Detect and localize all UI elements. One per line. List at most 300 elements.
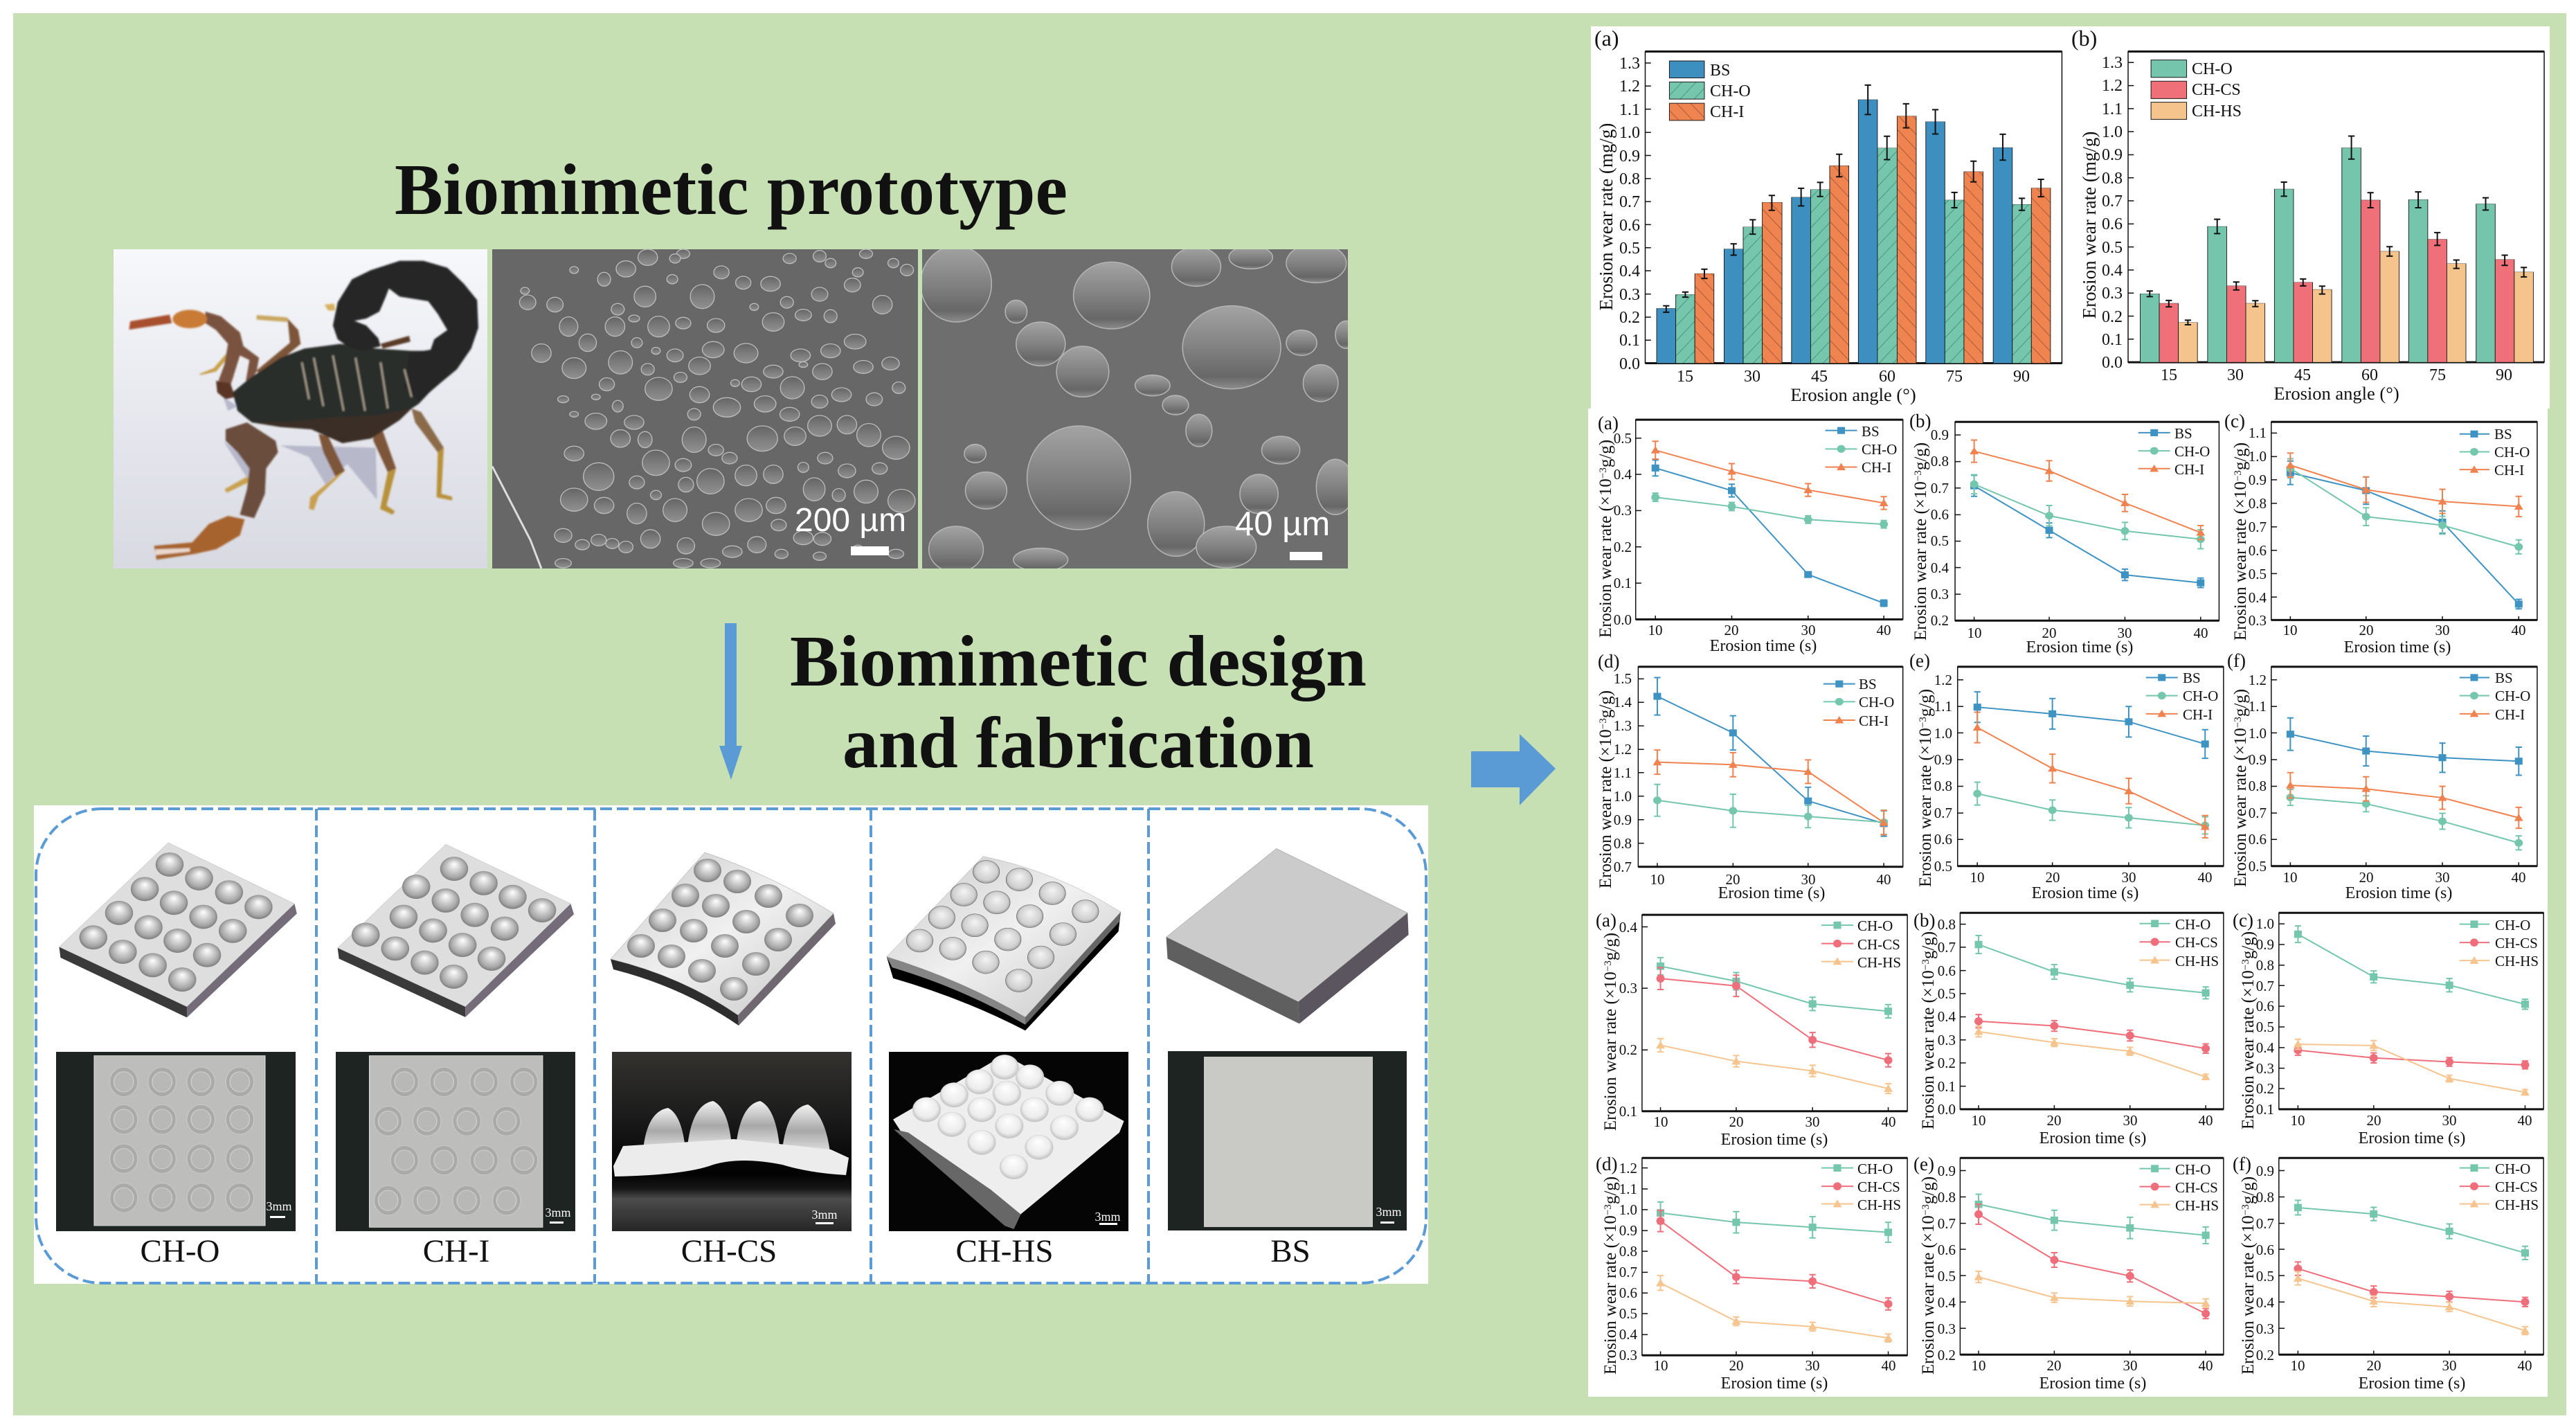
bar chart: erosion wear rate BS, CH-O, CH-I: 30: [1744, 368, 1760, 386]
line chart: row 4 (d): 0.6: [1619, 1285, 1637, 1301]
line chart: row 1 (c): Erosion wear rate (×10: [2231, 481, 2250, 641]
line chart: row 2 (f): 0.8: [2249, 778, 2267, 794]
line chart: row 3 (a): 0.2: [1619, 1041, 1637, 1058]
bar chart: erosion wear rate BS, CH-O, CH-I: Erosion angle (°): [1790, 384, 1916, 405]
bar chart: erosion wear rate BS, CH-O, CH-I: 60: [1879, 368, 1895, 386]
line chart: row 1 (c): 0.5: [2249, 566, 2267, 582]
line chart: row 4 (f): 40: [2517, 1357, 2532, 1374]
bar chart: erosion wear rate BS, CH-O, CH-I: 0.5: [1619, 240, 1640, 258]
bar chart: erosion wear rate CH-O, CH-CS, CH-HS: 1.1: [2102, 100, 2123, 118]
line chart: row 3 (c): CH-HS: [2495, 953, 2539, 969]
line chart: row 2 (f): 40: [2512, 869, 2525, 886]
photo: CH-O specimen: [56, 1052, 296, 1231]
specimen labels: CH-O: [141, 1233, 219, 1269]
line chart: row 1 (c): CH-O: [2494, 444, 2530, 460]
line chart: row 3 (a): g/g): [1601, 933, 1620, 960]
line chart: row 1 (b): CH-I: [2174, 461, 2204, 478]
line chart: row 1 (b): 0.3: [1931, 586, 1949, 602]
line chart: row 1 (a): −3: [1598, 467, 1609, 478]
line chart: row 3 (b): g/g): [1919, 931, 1938, 959]
bar chart: erosion wear rate CH-O, CH-CS, CH-HS: 15: [2161, 366, 2177, 384]
line chart: row 3 (c): 0.2: [2256, 1080, 2274, 1097]
line chart: row 2 (f): (f): [2227, 650, 2246, 671]
line chart: row 2 (f): Erosion time (s): [2345, 884, 2452, 902]
line chart: row 4 (e): 20: [2046, 1357, 2062, 1374]
line chart: row 2 (d): 10: [1650, 871, 1664, 888]
line chart: row 4 (d): CH-HS: [1857, 1197, 1901, 1213]
line chart: row 2 (d): CH-I: [1859, 713, 1889, 729]
line chart: row 3 (c): CH-CS: [2495, 935, 2538, 951]
line chart: row 4 (d): 0.9: [1619, 1222, 1637, 1239]
title: biomimetic prototype: Biomimetic prototype: [395, 149, 1068, 230]
line chart: row 4 (d): CH-CS: [1857, 1179, 1900, 1195]
line chart: row 3 (b): 0.4: [1938, 1008, 1956, 1025]
line chart: row 1 (b): 0.9: [1931, 427, 1949, 443]
line chart: row 4 (d): 0.8: [1619, 1243, 1637, 1260]
line chart: row 3 (c): 0.9: [2256, 936, 2274, 953]
line chart: row 4 (f): 0.6: [2256, 1242, 2274, 1258]
line chart: row 3 (b): −3: [1920, 959, 1931, 970]
line chart: row 4 (f): [2233, 1154, 2543, 1393]
line chart: row 4 (e): 0.6: [1938, 1242, 1956, 1258]
bar chart: erosion wear rate CH-O, CH-CS, CH-HS: 0.8: [2102, 170, 2123, 188]
line chart: row 1 (a): 0.5: [1614, 430, 1632, 447]
bar chart: erosion wear rate BS, CH-O, CH-I: 0.6: [1619, 217, 1640, 235]
line chart: row 2 (f): 20: [2359, 869, 2373, 886]
line chart: row 3 (a): CH-HS: [1857, 954, 1901, 971]
arrow: down: [719, 623, 742, 780]
line chart: row 2 (f): CH-I: [2495, 706, 2525, 723]
line chart: row 1 (c): 40: [2512, 622, 2525, 638]
photo: scorpion: [114, 249, 487, 569]
line chart: row 4 (e): 0.8: [1938, 1189, 1956, 1206]
line chart: row 2 (d): 40: [1876, 871, 1891, 888]
photo: CH-HS specimen: 3mm: [1095, 1210, 1121, 1224]
bar chart: erosion wear rate CH-O, CH-CS, CH-HS: 0.3: [2102, 285, 2123, 303]
line chart: row 2 (f): −3: [2233, 717, 2244, 728]
line chart: row 1 (c): CH-I: [2494, 462, 2524, 478]
bar chart: erosion wear rate CH-O, CH-CS, CH-HS: 1.3: [2102, 54, 2123, 72]
line chart: row 1 (c): Erosion time (s): [2344, 638, 2451, 656]
line chart: row 1 (a): BS: [1862, 423, 1880, 440]
line chart: row 4 (e): 10: [1972, 1357, 1985, 1374]
line chart: row 4 (f): g/g): [2239, 1176, 2258, 1204]
line chart: row 2 (f): 1.0: [2249, 725, 2267, 742]
line chart: row 3 (a): CH-CS: [1857, 936, 1900, 953]
line chart: row 2 (e): 40: [2197, 869, 2213, 886]
line chart: row 4 (f): 0.5: [2256, 1268, 2274, 1285]
line chart: row 3 (c): g/g): [2239, 931, 2258, 959]
line chart: row 4 (e): Erosion wear rate (×10: [1919, 1215, 1938, 1375]
line chart: row 1 (b): 30: [2117, 625, 2132, 641]
line chart: row 2 (f): 10: [2283, 869, 2297, 886]
line chart: row 2 (f): [2227, 650, 2537, 902]
line chart: row 4 (d): 0.3: [1619, 1347, 1637, 1363]
line chart: row 1 (a): 0.2: [1614, 539, 1632, 555]
model: BS: [1167, 848, 1409, 1023]
bar chart: erosion wear rate BS, CH-O, CH-I: 1.3: [1619, 55, 1640, 73]
line chart: row 4 (f): Erosion wear rate (×10: [2239, 1215, 2258, 1375]
line chart: row 2 (d): 20: [1725, 871, 1740, 888]
line chart: row 1 (a): 0.0: [1614, 611, 1632, 628]
photo: CH-CS specimen: [612, 1052, 852, 1231]
bar chart: erosion wear rate BS, CH-O, CH-I: CH-O: [1710, 82, 1751, 100]
line chart: row 2 (f): BS: [2495, 670, 2513, 686]
line chart: row 2 (d): 1.2: [1614, 741, 1632, 758]
line chart: row 4 (d): 0.4: [1619, 1326, 1638, 1343]
line chart: row 3 (a): 40: [1882, 1113, 1895, 1130]
line chart: row 4 (e): CH-CS: [2175, 1179, 2218, 1196]
line chart: row 1 (c): 0.7: [2249, 519, 2267, 535]
bar chart: erosion wear rate CH-O, CH-CS, CH-HS: 30: [2227, 366, 2244, 384]
line chart: row 3 (a): (a): [1596, 910, 1616, 931]
line chart: row 2 (d): 30: [1801, 871, 1815, 888]
line chart: row 2 (e): CH-O: [2183, 688, 2218, 704]
line chart: row 1 (b): CH-O: [2174, 443, 2210, 460]
line chart: row 1 (a): (a): [1598, 413, 1619, 433]
line chart: row 1 (a): Erosion time (s): [1710, 637, 1817, 655]
bar chart: erosion wear rate CH-O, CH-CS, CH-HS: 45: [2294, 366, 2311, 384]
line chart: row 1 (b): 0.2: [1931, 612, 1949, 629]
line chart: row 4 (d): g/g): [1601, 1176, 1620, 1204]
line chart: row 2 (f): 0.6: [2249, 831, 2267, 848]
line chart: row 1 (b): 0.4: [1931, 560, 1949, 576]
line chart: row 3 (a): 10: [1653, 1113, 1668, 1130]
line chart: row 2 (d): g/g): [1596, 690, 1615, 718]
line chart: row 1 (c): 0.8: [2249, 495, 2267, 512]
line chart: row 1 (a): 10: [1648, 622, 1663, 638]
bar chart: erosion wear rate BS, CH-O, CH-I: 0.3: [1619, 286, 1640, 304]
line chart: row 1 (b): 40: [2193, 625, 2208, 641]
line chart: row 3 (c): −3: [2240, 959, 2251, 970]
line chart: row 2 (d): 1.0: [1614, 788, 1632, 805]
line chart: row 3 (b): (b): [1913, 910, 1935, 931]
line chart: row 2 (f): Erosion wear rate (×10: [2231, 728, 2250, 887]
bar chart: erosion wear rate CH-O, CH-CS, CH-HS: CH-CS: [2192, 81, 2241, 99]
line chart: row 1 (c): 1.1: [2249, 424, 2267, 441]
line chart: row 4 (d): Erosion time (s): [1721, 1375, 1828, 1393]
line chart: row 2 (d): [1596, 651, 1903, 902]
line chart: row 2 (d): 0.9: [1614, 812, 1632, 828]
bar chart: erosion wear rate BS, CH-O, CH-I: 1.1: [1619, 101, 1640, 119]
line chart: row 4 (e): −3: [1920, 1204, 1931, 1215]
bar chart: erosion wear rate CH-O, CH-CS, CH-HS: 0.0: [2102, 354, 2123, 372]
line chart: row 1 (a): 40: [1876, 622, 1891, 638]
specimen labels: BS: [1270, 1233, 1310, 1269]
line chart: row 3 (c): 0.4: [2256, 1039, 2275, 1056]
line chart: row 1 (c): 0.6: [2249, 542, 2267, 559]
arrow: right: [1471, 734, 1556, 805]
line chart: row 1 (b): Erosion time (s): [2026, 638, 2133, 656]
photo: CH-O specimen: 3mm: [266, 1199, 292, 1213]
line chart: row 4 (f): 0.7: [2256, 1215, 2274, 1232]
line chart: row 1 (b): 0.7: [1931, 480, 1949, 496]
line chart: row 2 (e): 1.1: [1934, 698, 1952, 715]
line chart: row 1 (a): CH-I: [1862, 459, 1891, 476]
bar chart: erosion wear rate BS, CH-O, CH-I: 0.1: [1619, 332, 1640, 350]
photo: CH-HS specimen: [889, 1052, 1128, 1231]
line chart: row 1 (b): [1909, 411, 2219, 656]
line chart: row 4 (f): 20: [2366, 1357, 2381, 1374]
line chart: row 2 (e): BS: [2183, 670, 2201, 686]
panel: specimens: [34, 805, 1428, 1284]
line chart: row 4 (d): 10: [1653, 1357, 1668, 1374]
line chart: row 3 (b): 0.3: [1938, 1032, 1956, 1048]
line chart: row 4 (e): g/g): [1919, 1176, 1938, 1204]
line chart: row 1 (b): 0.8: [1931, 453, 1949, 469]
line chart: row 4 (d): 1.2: [1619, 1160, 1637, 1176]
line chart: row 3 (c): Erosion wear rate (×10: [2239, 970, 2258, 1129]
line chart: row 3 (b): 0.5: [1938, 985, 1956, 1002]
line chart: row 4 (d): CH-O: [1857, 1161, 1893, 1177]
heading: biomimetic design and fabrication: [790, 620, 1367, 783]
line chart: row 2 (d): CH-O: [1859, 694, 1894, 710]
bar chart: erosion wear rate BS, CH-O, CH-I: 0.8: [1619, 170, 1640, 188]
line chart: row 4 (f): 0.8: [2256, 1189, 2274, 1206]
bar chart: erosion wear rate CH-O, CH-CS, CH-HS: CH-HS: [2192, 102, 2242, 120]
line chart: row 4 (d): 0.7: [1619, 1264, 1637, 1280]
bar chart: erosion wear rate BS, CH-O, CH-I: 0.0: [1619, 355, 1640, 373]
line chart: row 3 (a): CH-O: [1857, 918, 1893, 934]
line chart: row 2 (e): 1.2: [1934, 672, 1952, 688]
model: CH-I: [338, 844, 574, 1017]
line chart: row 3 (a): 0.4: [1619, 919, 1638, 936]
bar chart: erosion wear rate CH-O, CH-CS, CH-HS: [2071, 26, 2544, 404]
line chart: row 1 (b): BS: [2174, 425, 2192, 442]
line chart: row 3 (b): 0.2: [1938, 1055, 1956, 1071]
line chart: row 3 (c): 0.7: [2256, 978, 2274, 994]
model: CH-CS: [611, 852, 836, 1026]
line chart: row 4 (d): 20: [1729, 1357, 1743, 1374]
line chart: row 4 (f): 0.4: [2256, 1294, 2275, 1311]
line chart: row 1 (b): 0.5: [1931, 532, 1949, 549]
line chart: row 3 (b): CH-CS: [2175, 934, 2218, 951]
line chart: row 1 (c): −3: [2233, 470, 2244, 481]
line chart: row 2 (d): Erosion time (s): [1718, 884, 1825, 902]
bar chart: erosion wear rate CH-O, CH-CS, CH-HS: 75: [2429, 366, 2446, 384]
line chart: row 2 (d): 0.8: [1614, 835, 1632, 852]
line chart: row 3 (a): 20: [1729, 1113, 1743, 1130]
panel: charts background: [1588, 26, 2550, 1397]
line chart: row 4 (e): 0.5: [1938, 1268, 1956, 1285]
line chart: row 2 (f): 0.7: [2249, 805, 2267, 821]
heading: biomimetic design and fabrication: and fabrication: [843, 702, 1314, 783]
line chart: row 3 (c): 10: [2290, 1112, 2305, 1129]
line chart: row 1 (a): 0.3: [1614, 502, 1632, 519]
line chart: row 1 (b): Erosion wear rate (×10: [1911, 481, 1930, 641]
line chart: row 4 (f): CH-HS: [2495, 1197, 2539, 1213]
line chart: row 3 (c): (c): [2233, 910, 2253, 931]
line chart: row 3 (c): 30: [2442, 1112, 2456, 1129]
line chart: row 4 (f): CH-CS: [2495, 1179, 2538, 1195]
line chart: row 1 (a): 30: [1801, 622, 1815, 638]
line chart: row 2 (e): 10: [1970, 869, 1984, 886]
bar chart: erosion wear rate CH-O, CH-CS, CH-HS: CH-O: [2192, 60, 2233, 78]
bar chart: erosion wear rate BS, CH-O, CH-I: 90: [2013, 368, 2030, 386]
photo: CH-I specimen: [336, 1052, 575, 1231]
photo: BS specimen: [1168, 1051, 1407, 1230]
line chart: row 4 (e): 40: [2199, 1357, 2213, 1374]
model: CH-HS: [887, 857, 1121, 1030]
line chart: row 1 (a): [1596, 413, 1903, 655]
bar chart: erosion wear rate CH-O, CH-CS, CH-HS: 0.7: [2102, 193, 2123, 211]
line chart: row 3 (b): [1913, 910, 2224, 1147]
line chart: row 2 (e): CH-I: [2183, 706, 2213, 723]
line chart: row 4 (d): 1.1: [1619, 1181, 1637, 1197]
line chart: row 2 (e): 20: [2045, 869, 2060, 886]
line chart: row 3 (c): CH-O: [2495, 917, 2530, 933]
line chart: row 4 (e): CH-O: [2175, 1161, 2210, 1178]
line chart: row 3 (a): 0.1: [1619, 1103, 1637, 1120]
photo: CH-CS specimen: 3mm: [811, 1208, 838, 1221]
line chart: row 3 (a): 30: [1805, 1113, 1819, 1130]
bar chart: erosion wear rate CH-O, CH-CS, CH-HS: 0.6: [2102, 215, 2123, 233]
line chart: row 4 (f): Erosion time (s): [2359, 1375, 2465, 1393]
line chart: row 3 (b): Erosion time (s): [2039, 1129, 2146, 1147]
bar chart: erosion wear rate BS, CH-O, CH-I: 0.7: [1619, 193, 1640, 211]
line chart: row 1 (b): (b): [1909, 411, 1931, 431]
heading: biomimetic design and fabrication: Biomimetic design: [790, 620, 1367, 701]
line chart: row 3 (c): 0.8: [2256, 957, 2274, 974]
bar chart: erosion wear rate CH-O, CH-CS, CH-HS: Erosion angle (°): [2273, 383, 2399, 404]
line chart: row 4 (d): −3: [1603, 1204, 1614, 1215]
line chart: row 1 (b): g/g): [1911, 442, 1930, 470]
line chart: row 4 (d): 40: [1882, 1357, 1895, 1374]
line chart: row 3 (b): CH-HS: [2175, 953, 2219, 969]
line chart: row 2 (f): g/g): [2231, 689, 2250, 717]
line chart: row 2 (f): 1.2: [2249, 672, 2267, 688]
bar chart: erosion wear rate BS, CH-O, CH-I: 75: [1946, 368, 1963, 386]
line chart: row 1 (c): (c): [2224, 411, 2245, 431]
line chart: row 2 (e): 0.6: [1934, 831, 1952, 848]
line chart: row 3 (b): 0.6: [1938, 963, 1956, 979]
line chart: row 4 (d): [1596, 1154, 1907, 1393]
line chart: row 2 (e): 0.8: [1934, 778, 1952, 794]
line chart: row 4 (f): −3: [2240, 1204, 2251, 1215]
line chart: row 4 (e): 0.7: [1938, 1215, 1956, 1232]
line chart: row 1 (c): 0.9: [2249, 472, 2267, 488]
specimen labels: CH-I: [423, 1233, 489, 1269]
line chart: row 1 (c): [2224, 411, 2537, 656]
photo: SEM image 40 µm: [921, 244, 1357, 573]
line chart: row 1 (b): 20: [2042, 625, 2056, 641]
line chart: row 3 (a): 0.3: [1619, 980, 1637, 996]
bar chart: erosion wear rate BS, CH-O, CH-I: CH-I: [1710, 103, 1744, 121]
photo: CH-I specimen: 3mm: [545, 1206, 571, 1219]
line chart: row 4 (e): CH-HS: [2175, 1197, 2219, 1214]
bar chart: erosion wear rate BS, CH-O, CH-I: 0.4: [1619, 262, 1640, 280]
bar chart: erosion wear rate BS, CH-O, CH-I: 0.9: [1619, 147, 1640, 165]
line chart: row 2 (e): Erosion time (s): [2032, 884, 2138, 902]
line chart: row 4 (f): 0.9: [2256, 1163, 2274, 1179]
line chart: row 3 (b): 40: [2199, 1112, 2213, 1129]
photo: BS specimen: 3mm: [1376, 1205, 1402, 1219]
line chart: row 1 (c): 20: [2359, 622, 2373, 638]
scale label: 40 µm: 40 µm: [1235, 505, 1330, 543]
line chart: row 1 (c): 10: [2283, 622, 2297, 638]
line chart: row 4 (d): 0.5: [1619, 1305, 1637, 1322]
line chart: row 4 (d): (d): [1596, 1154, 1617, 1174]
bar chart: erosion wear rate CH-O, CH-CS, CH-HS: 60: [2361, 366, 2378, 384]
line chart: row 2 (e): −3: [1918, 717, 1929, 728]
line chart: row 4 (f): (f): [2233, 1154, 2251, 1174]
line chart: row 4 (f): 10: [2290, 1357, 2305, 1374]
line chart: row 2 (d): BS: [1859, 676, 1877, 692]
line chart: row 2 (e): 0.5: [1934, 858, 1952, 875]
bar chart: erosion wear rate CH-O, CH-CS, CH-HS: 0.1: [2102, 331, 2123, 349]
line chart: row 2 (d): (d): [1598, 651, 1619, 672]
line chart: row 2 (f): CH-O: [2495, 688, 2530, 704]
line chart: row 3 (c): 1.0: [2256, 915, 2274, 932]
line chart: row 2 (e): [1909, 650, 2224, 902]
line chart: row 1 (a): 0.1: [1614, 575, 1632, 591]
bar chart: erosion wear rate CH-O, CH-CS, CH-HS: 0.9: [2102, 146, 2123, 164]
line chart: row 1 (c): 30: [2435, 622, 2449, 638]
line chart: row 3 (b): 10: [1972, 1112, 1985, 1129]
line chart: row 2 (f): 0.5: [2249, 858, 2267, 875]
scale label: 200 µm: 200 µm: [795, 502, 906, 539]
line chart: row 2 (e): (e): [1909, 650, 1930, 671]
line chart: row 3 (b): Erosion wear rate (×10: [1919, 970, 1938, 1129]
line chart: row 4 (f): CH-O: [2495, 1161, 2530, 1177]
line chart: row 2 (e): 30: [2121, 869, 2136, 886]
line chart: row 4 (e): Erosion time (s): [2039, 1375, 2146, 1393]
line chart: row 1 (a): g/g): [1596, 440, 1615, 467]
line chart: row 1 (a): CH-O: [1862, 441, 1897, 458]
line chart: row 1 (a): 0.4: [1614, 466, 1632, 483]
line chart: row 1 (c): 0.4: [2249, 589, 2267, 606]
bar chart: erosion wear rate BS, CH-O, CH-I: 1.2: [1619, 78, 1640, 96]
line chart: row 2 (e): 0.9: [1934, 751, 1952, 768]
line chart: row 4 (e): 30: [2123, 1357, 2138, 1374]
line chart: row 1 (b): 0.6: [1931, 506, 1949, 523]
line chart: row 4 (e): 0.3: [1938, 1321, 1956, 1337]
line chart: row 2 (d): 1.1: [1614, 764, 1632, 781]
line chart: row 2 (d): 1.5: [1614, 670, 1632, 687]
bar chart: erosion wear rate CH-O, CH-CS, CH-HS: (b): [2071, 26, 2097, 51]
specimen labels: CH-CS: [681, 1233, 777, 1269]
line chart: row 2 (e): g/g): [1916, 689, 1935, 717]
line chart: row 3 (b): 30: [2123, 1112, 2138, 1129]
line chart: row 3 (a): −3: [1603, 960, 1614, 972]
bar chart: erosion wear rate CH-O, CH-CS, CH-HS: 0.2: [2102, 308, 2123, 326]
line chart: row 4 (e): (e): [1913, 1154, 1934, 1174]
line chart: row 3 (c): 0.6: [2256, 998, 2274, 1014]
line chart: row 4 (d): 1.0: [1619, 1201, 1637, 1218]
bar chart: erosion wear rate BS, CH-O, CH-I: [1594, 26, 2062, 405]
line chart: row 1 (c): 1.0: [2249, 448, 2267, 465]
line chart: row 2 (e): 1.0: [1934, 725, 1952, 742]
line chart: row 2 (d): Erosion wear rate (×10: [1596, 729, 1615, 888]
line chart: row 3 (b): 0.8: [1938, 916, 1956, 933]
line chart: row 3 (b): 0.1: [1938, 1078, 1956, 1095]
bar chart: erosion wear rate CH-O, CH-CS, CH-HS: 0.5: [2102, 239, 2123, 257]
line chart: row 1 (b): 10: [1967, 625, 1981, 641]
line chart: row 4 (d): 30: [1805, 1357, 1819, 1374]
line chart: row 4 (e): 0.4: [1938, 1294, 1956, 1311]
line chart: row 3 (a): Erosion time (s): [1721, 1131, 1828, 1149]
line chart: row 4 (e): 0.9: [1938, 1163, 1956, 1179]
line chart: row 3 (c): Erosion time (s): [2359, 1129, 2465, 1147]
line chart: row 3 (c): 0.5: [2256, 1019, 2274, 1035]
line chart: row 2 (d): 1.3: [1614, 717, 1632, 734]
line chart: row 1 (c): g/g): [2231, 442, 2250, 470]
line chart: row 1 (b): −3: [1913, 470, 1924, 481]
line chart: row 4 (e): 0.2: [1938, 1347, 1956, 1363]
line chart: row 2 (f): 30: [2435, 869, 2449, 886]
line chart: row 3 (c): [2233, 910, 2543, 1147]
line chart: row 4 (d): Erosion wear rate (×10: [1601, 1215, 1620, 1375]
